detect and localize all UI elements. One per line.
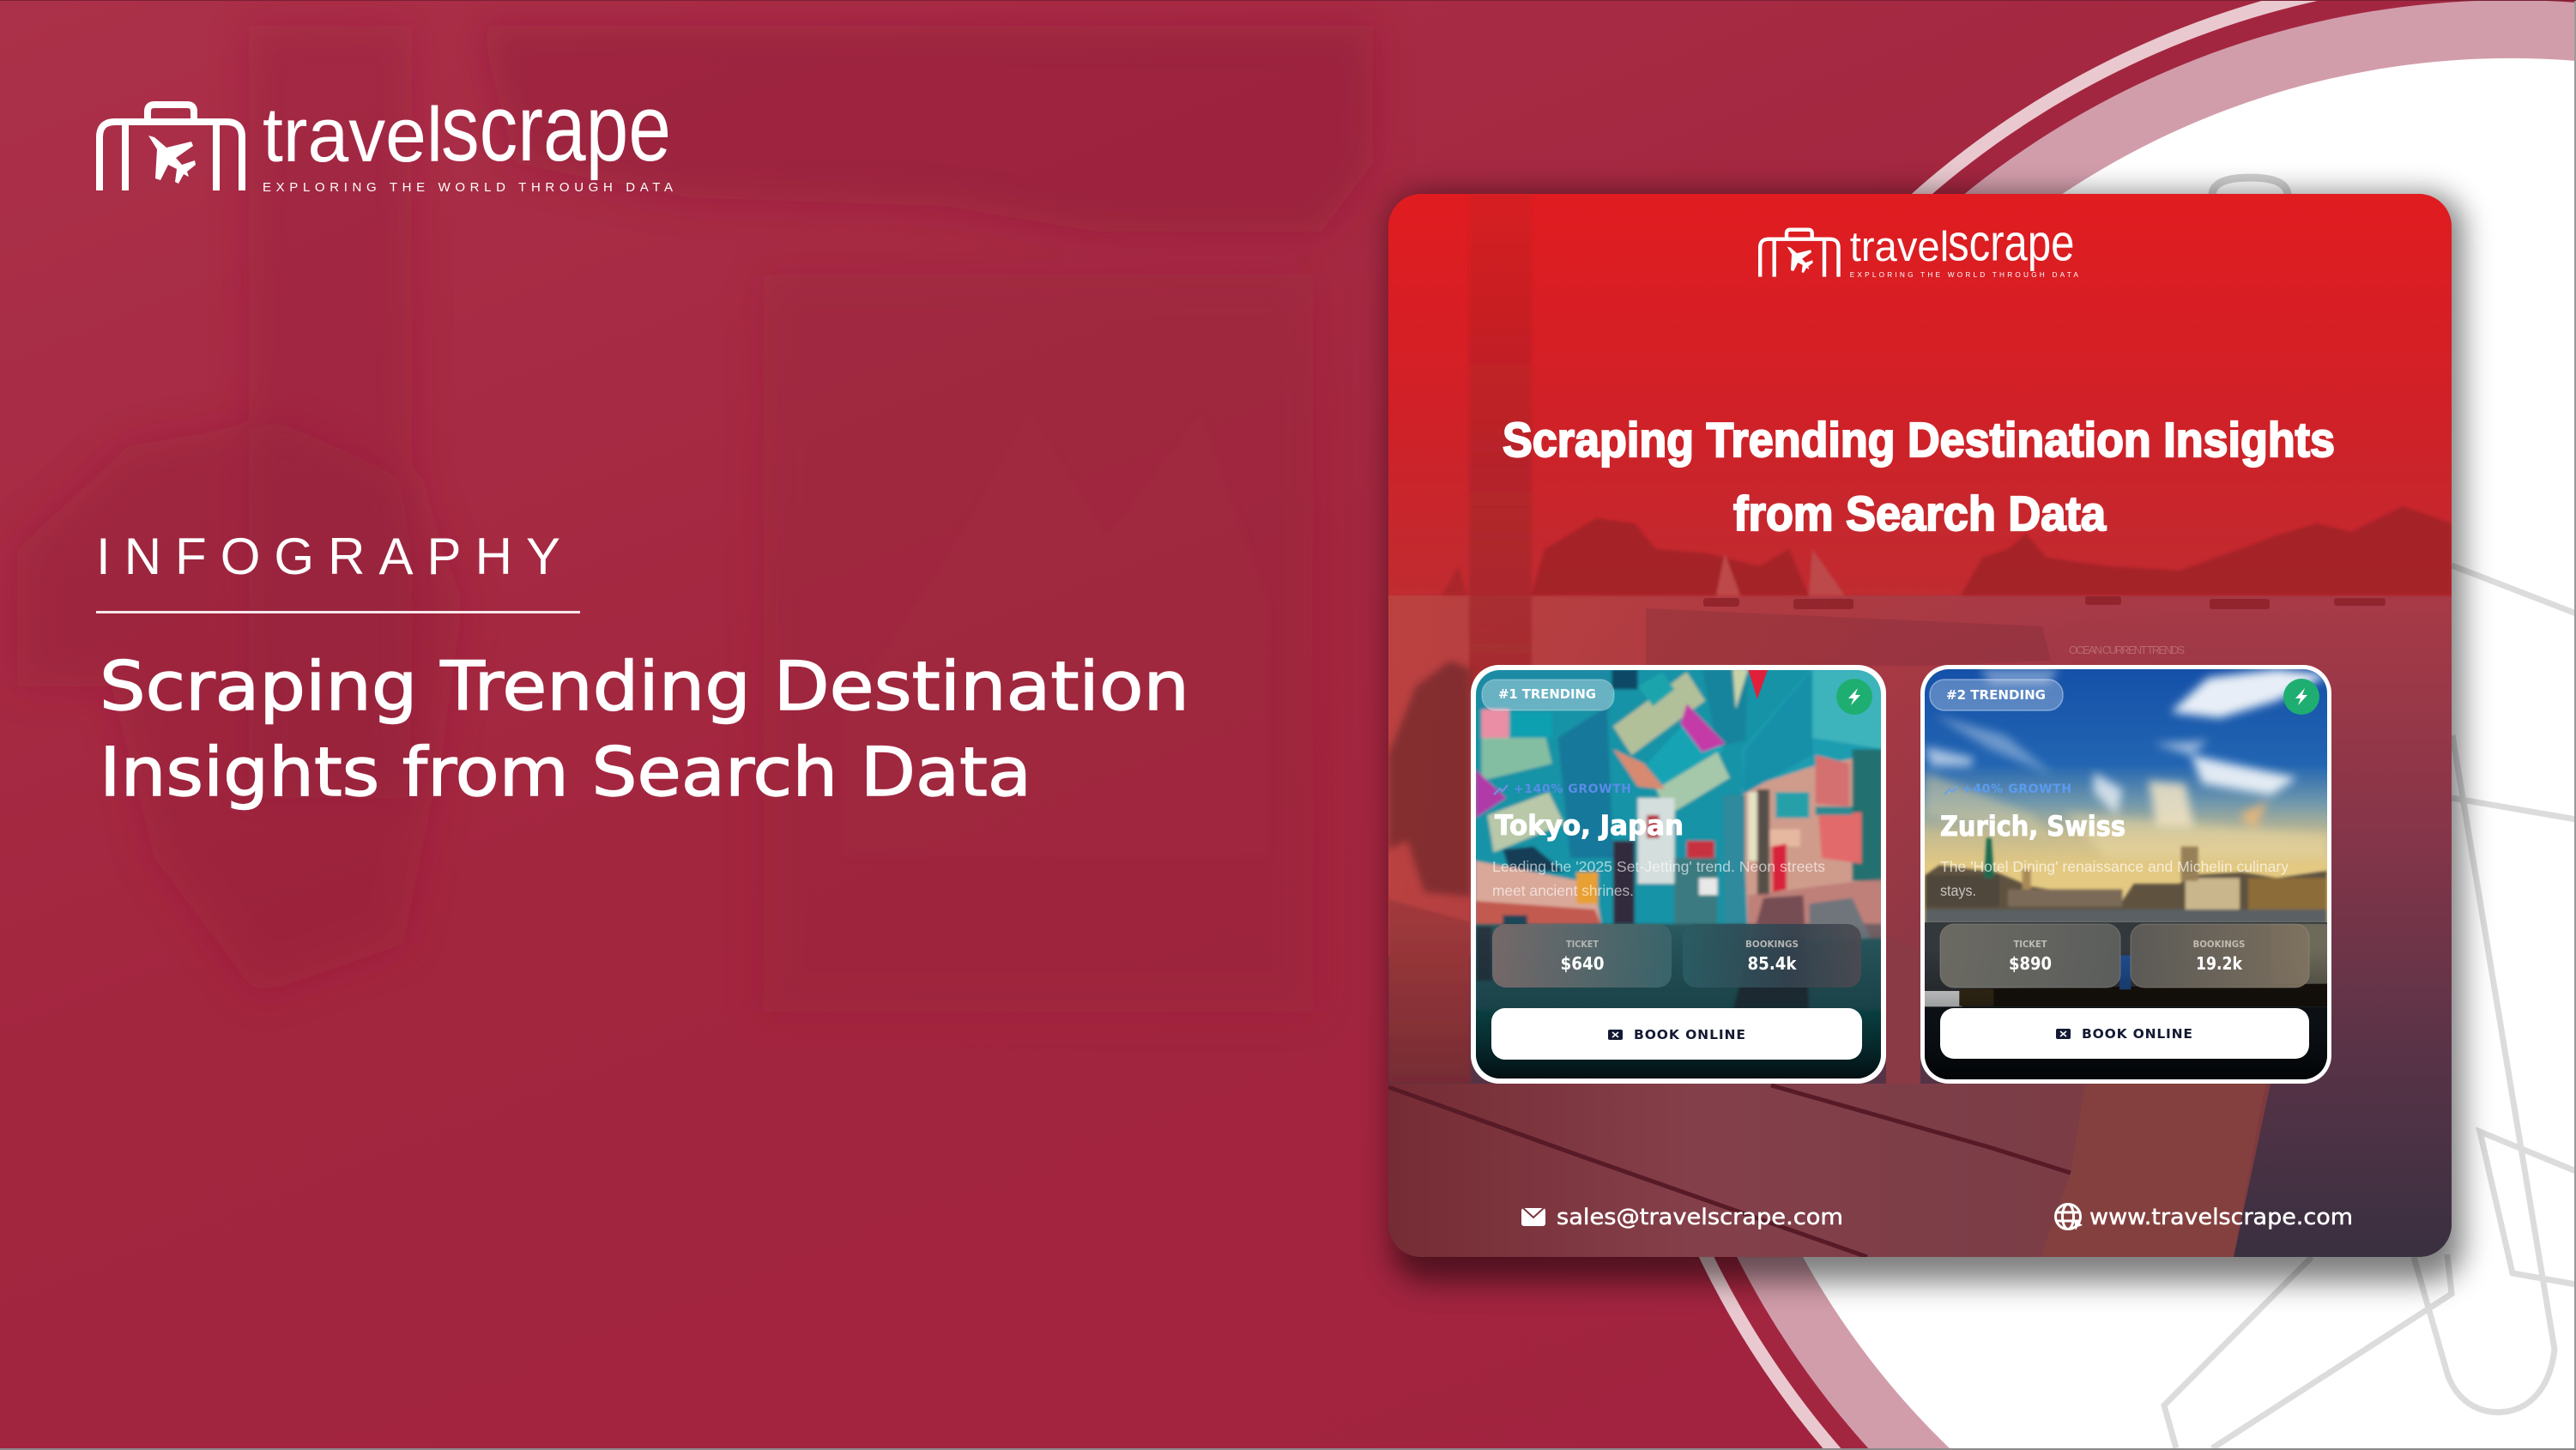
laptop on table xyxy=(1646,608,2051,666)
description xyxy=(1940,858,2289,899)
wordmark: travel xyxy=(263,93,443,178)
stat: ticket: $890 xyxy=(2009,953,2052,974)
photo: Zurich skyline xyxy=(1922,667,2331,1084)
growth label: +40% GROWTH xyxy=(1962,782,2071,796)
small wordmark: scrape xyxy=(1948,213,2075,271)
button: book online xyxy=(1491,1008,1862,1060)
wordmark xyxy=(263,76,671,181)
description: meet ancient shrines. xyxy=(1492,882,1634,899)
stat: ticket: TICKET xyxy=(1566,939,1599,950)
suitcase line art watermark xyxy=(2164,178,2576,1448)
button: book online: BOOK ONLINE xyxy=(2082,1026,2192,1042)
button: book online: BOOK ONLINE xyxy=(1634,1027,1745,1042)
logo: travelscrape header xyxy=(100,76,673,195)
destination name: Tokyo, Japan xyxy=(1495,809,1684,842)
icon: green bolt badge xyxy=(2283,679,2319,715)
card title: Scraping Trending Destination Insights xyxy=(1503,413,2335,468)
tagline: EXPLORING THE WORLD THROUGH DATA xyxy=(263,180,673,195)
small wordmark: travel xyxy=(1850,223,1949,270)
destination card: Tokyo xyxy=(1471,665,1886,1084)
description xyxy=(1492,858,1825,899)
icon: green bolt badge xyxy=(1836,679,1872,715)
panel: card drop shadow xyxy=(1392,194,2463,1282)
stat: ticket: TICKET xyxy=(2013,939,2047,950)
wordmark: scrape xyxy=(441,76,671,181)
logo: card header xyxy=(1760,213,2078,279)
stat: bookings: 85.4k xyxy=(1747,953,1797,974)
main heading: Scraping Trending Destination xyxy=(100,649,1189,726)
card background photo: wooden deck xyxy=(1388,899,2271,1257)
stat: bookings: BOOKINGS xyxy=(1745,939,1799,950)
icon: ticket xyxy=(2056,1029,2071,1039)
button: book online xyxy=(1940,1008,2309,1059)
icon: globe xyxy=(2056,1205,2083,1230)
badge: #2 trending: #2 TRENDING xyxy=(1946,687,2046,703)
card title xyxy=(1503,413,2335,541)
card background photo: sea and islands xyxy=(1388,194,2452,1257)
stat: ticket xyxy=(1492,924,1672,988)
badge: #2 trending xyxy=(1930,680,2063,710)
card title: from Search Data xyxy=(1733,486,2107,541)
photo: Tokyo street xyxy=(1472,667,1886,1084)
icon: small suitcase xyxy=(1760,230,1838,277)
small tagline: EXPLORING THE WORLD THROUGH DATA xyxy=(1850,271,2078,279)
stat: ticket: $640 xyxy=(1560,953,1605,974)
stat: bookings xyxy=(2131,924,2309,988)
panel: main infographic card xyxy=(1388,194,2452,1257)
main heading xyxy=(100,649,1189,812)
divider under eyebrow xyxy=(96,611,580,613)
footer: website contact: www.travelscrape.com xyxy=(2089,1205,2353,1230)
footer: email contact: sales@travelscrape.com xyxy=(1557,1205,1843,1230)
main heading: Insights from Search Data xyxy=(100,734,1031,812)
description: The 'Hotel Dining' renaissance and Michelin culinary xyxy=(1940,858,2289,875)
icon: ticket xyxy=(1608,1030,1623,1040)
icon: envelope xyxy=(1521,1208,1545,1226)
description: stays. xyxy=(1940,882,1976,899)
plant silhouette xyxy=(1388,661,1471,897)
stat: bookings xyxy=(1683,924,1861,988)
destination name: Zurich, Swiss xyxy=(1940,810,2126,843)
stat: bookings: 19.2k xyxy=(2196,953,2243,974)
white circular area with rings xyxy=(1610,0,2576,1450)
description: Leading the '2025 Set-Jetting' trend. Neon streets xyxy=(1492,858,1825,875)
destination card: Zurich xyxy=(1920,665,2331,1084)
growth label: +140% GROWTH xyxy=(1514,782,1631,796)
card background photo: sea and islands: OCEAN CURRENT TRENDS xyxy=(2069,643,2185,656)
badge: #1 trending xyxy=(1482,680,1614,710)
icon: suitcase with plane xyxy=(100,105,242,190)
eyebrow label: INFOGRAPHY xyxy=(96,528,560,585)
stat: bookings: BOOKINGS xyxy=(2193,939,2246,950)
badge: #1 trending: #1 TRENDING xyxy=(1498,686,1596,702)
stat: ticket xyxy=(1940,924,2120,988)
small wordmark xyxy=(1850,213,2075,271)
